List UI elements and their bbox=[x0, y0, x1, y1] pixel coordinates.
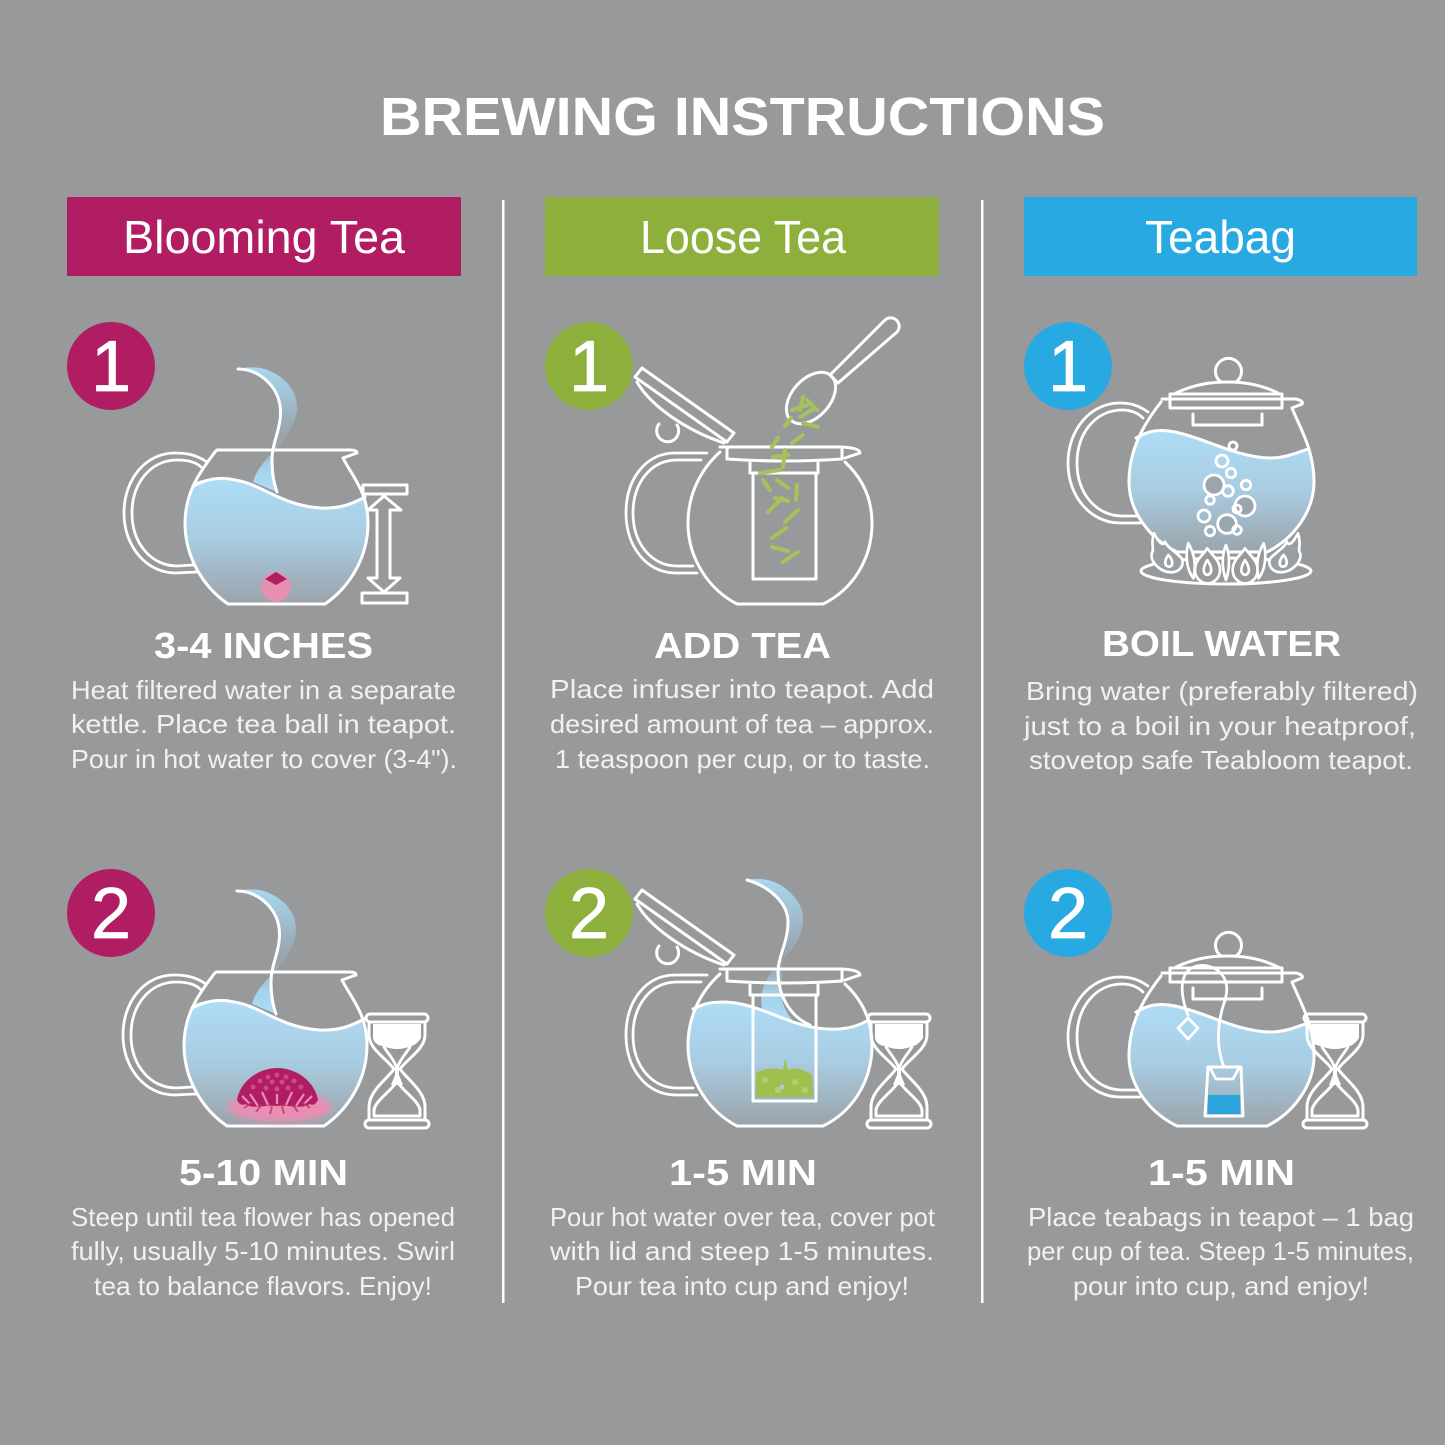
text block: step 1: Heat filtered water in a separate bbox=[71, 675, 456, 705]
text block: step 2 bbox=[1027, 1202, 1414, 1301]
text block: step 1: 1 teaspoon per cup, or to taste. bbox=[555, 744, 930, 774]
column divider right bbox=[981, 200, 984, 1303]
step 2 badge: 2 bbox=[1048, 874, 1088, 954]
heading: Blooming Tea: Blooming Tea bbox=[123, 211, 405, 263]
heading: 3-4 inches: 3-4 INCHES bbox=[154, 625, 373, 666]
step 2 badge: 2 bbox=[91, 874, 131, 954]
text block: step 2: pour into cup, and enjoy! bbox=[1073, 1271, 1369, 1301]
panel: teabag column bbox=[1023, 197, 1418, 1301]
title: BREWING INSTRUCTIONS bbox=[380, 87, 1105, 147]
step 1 badge: 1 bbox=[91, 327, 131, 407]
text block: step 2: per cup of tea. Steep 1-5 minutes, bbox=[1027, 1236, 1414, 1266]
heading: Teabag bbox=[1024, 197, 1417, 276]
icon: teapot with teabag and hourglass bbox=[1068, 932, 1367, 1134]
text block: step 2: fully, usually 5-10 minutes. Swirl bbox=[71, 1236, 455, 1266]
text block: step 1: kettle. Place tea ball in teapot. bbox=[71, 709, 456, 739]
heading: 1-5 min: 1-5 MIN bbox=[1148, 1152, 1295, 1193]
text block: step 2: Place teabags in teapot – 1 bag bbox=[1028, 1202, 1414, 1232]
text block: step 1: Pour in hot water to cover (3-4"). bbox=[71, 744, 457, 774]
heading: 1-5 min: 1-5 MIN bbox=[669, 1152, 817, 1193]
icon: teapot with water and tea ball bbox=[124, 367, 407, 610]
text block: step 1 bbox=[1023, 676, 1418, 775]
step 2 badge bbox=[67, 869, 155, 957]
text block: step 1: stovetop safe Teabloom teapot. bbox=[1029, 745, 1413, 775]
step 2 badge bbox=[1024, 869, 1112, 957]
heading: boil water: BOIL WATER bbox=[1102, 623, 1341, 664]
text block: step 2: with lid and steep 1-5 minutes. bbox=[549, 1236, 934, 1266]
text block: step 1: Bring water (preferably filtered) bbox=[1026, 676, 1418, 706]
heading: add tea: ADD TEA bbox=[654, 625, 831, 666]
step 2 badge: 2 bbox=[569, 874, 609, 954]
text block: step 2: Pour hot water over tea, cover pot bbox=[550, 1202, 936, 1232]
step 2 badge bbox=[545, 869, 633, 957]
text block: step 1: desired amount of tea – approx. bbox=[550, 709, 934, 739]
text block: step 2 bbox=[71, 1202, 455, 1301]
icon: teapot boiling on flames bbox=[1068, 358, 1318, 584]
heading: Loose Tea: Loose Tea bbox=[640, 211, 846, 263]
heading: Blooming Tea bbox=[67, 197, 461, 276]
text block: step 2: Pour tea into cup and enjoy! bbox=[575, 1271, 909, 1301]
icon: teapot with infuser and spoon bbox=[626, 318, 899, 604]
panel: loose tea column bbox=[545, 197, 939, 1301]
step 1 badge: 1 bbox=[569, 327, 609, 407]
heading: Loose Tea bbox=[545, 197, 939, 276]
step 1 badge bbox=[545, 322, 633, 410]
text block: step 1 bbox=[550, 674, 934, 774]
icon: teapot with water poured over tea and hourglass bbox=[626, 879, 931, 1132]
step 1 badge bbox=[67, 322, 155, 410]
heading: 5-10 min: 5-10 MIN bbox=[179, 1152, 348, 1193]
text block: step 1: Place infuser into teapot. Add bbox=[550, 674, 934, 704]
panel: blooming tea column bbox=[67, 197, 461, 1301]
step 1 badge: 1 bbox=[1048, 327, 1088, 407]
heading: Teabag: Teabag bbox=[1145, 211, 1296, 263]
step 1 badge bbox=[1024, 322, 1112, 410]
text block: step 2: tea to balance flavors. Enjoy! bbox=[94, 1271, 432, 1301]
text block: step 2: Steep until tea flower has opened bbox=[71, 1202, 455, 1232]
burner and flames bbox=[1141, 533, 1311, 584]
column divider left bbox=[502, 200, 504, 1303]
icon: teapot with opened flower and hourglass bbox=[123, 889, 429, 1132]
text block: step 1: just to a boil in your heatproof, bbox=[1023, 711, 1416, 741]
text block: step 1 bbox=[71, 675, 457, 774]
text block: step 2 bbox=[549, 1202, 936, 1301]
